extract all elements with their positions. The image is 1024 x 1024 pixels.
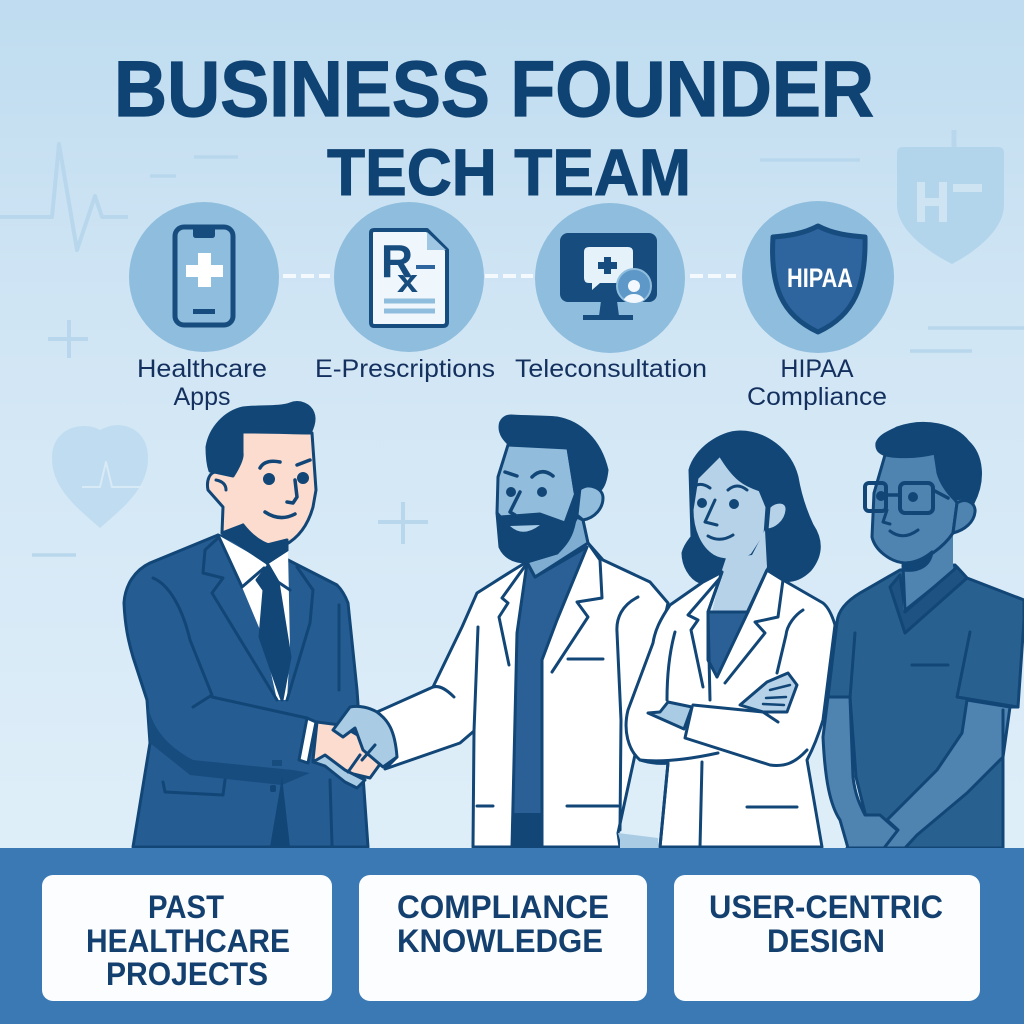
card: user-centric design: USER-CENTRIC bbox=[709, 889, 943, 925]
person: tech team member in scrubs bbox=[823, 423, 1024, 848]
connector dashes between icons bbox=[283, 274, 736, 278]
icon label: Teleconsultation: Teleconsultation bbox=[515, 355, 707, 383]
card: user-centric design bbox=[674, 875, 980, 1001]
icon: HIPAA shield bbox=[742, 201, 894, 353]
card: compliance knowledge: KNOWLEDGE bbox=[397, 923, 603, 959]
handshake bbox=[299, 706, 397, 788]
card: past healthcare projects: HEALTHCARE bbox=[86, 923, 290, 959]
card: past healthcare projects: PROJECTS bbox=[106, 956, 268, 992]
card: past healthcare projects bbox=[42, 875, 332, 1001]
card: user-centric design: DESIGN bbox=[767, 923, 885, 959]
title: BUSINESS FOUNDER bbox=[114, 44, 874, 133]
icon: teleconsultation monitor bbox=[535, 203, 685, 353]
icon: e-prescription document bbox=[334, 202, 484, 352]
footer band bbox=[0, 848, 1024, 1024]
card: compliance knowledge: COMPLIANCE bbox=[397, 889, 609, 925]
background motifs: pulse line, crosses, heart and shield bbox=[0, 130, 1024, 555]
card: past healthcare projects: PAST bbox=[148, 889, 224, 925]
icon: HIPAA shield: HIPAA bbox=[787, 263, 853, 293]
icon: e-prescription document: x bbox=[397, 263, 418, 299]
icon label: E-Prescriptions: E-Prescriptions bbox=[315, 355, 495, 383]
icon label: HIPAA Compliance: HIPAA bbox=[780, 355, 854, 383]
icon label: Healthcare Apps: Apps bbox=[174, 383, 230, 411]
person: business founder in suit bbox=[124, 403, 368, 847]
icon label: HIPAA Compliance: Compliance bbox=[747, 383, 887, 411]
icon label: Healthcare Apps: Healthcare bbox=[137, 355, 267, 383]
person: bearded male doctor bbox=[377, 416, 668, 848]
card: compliance knowledge bbox=[359, 875, 647, 1001]
icon: healthcare app phone bbox=[129, 202, 279, 352]
subtitle: TECH TEAM bbox=[327, 135, 691, 209]
icon: e-prescription document: R bbox=[381, 235, 413, 287]
person: female doctor bbox=[626, 432, 835, 847]
